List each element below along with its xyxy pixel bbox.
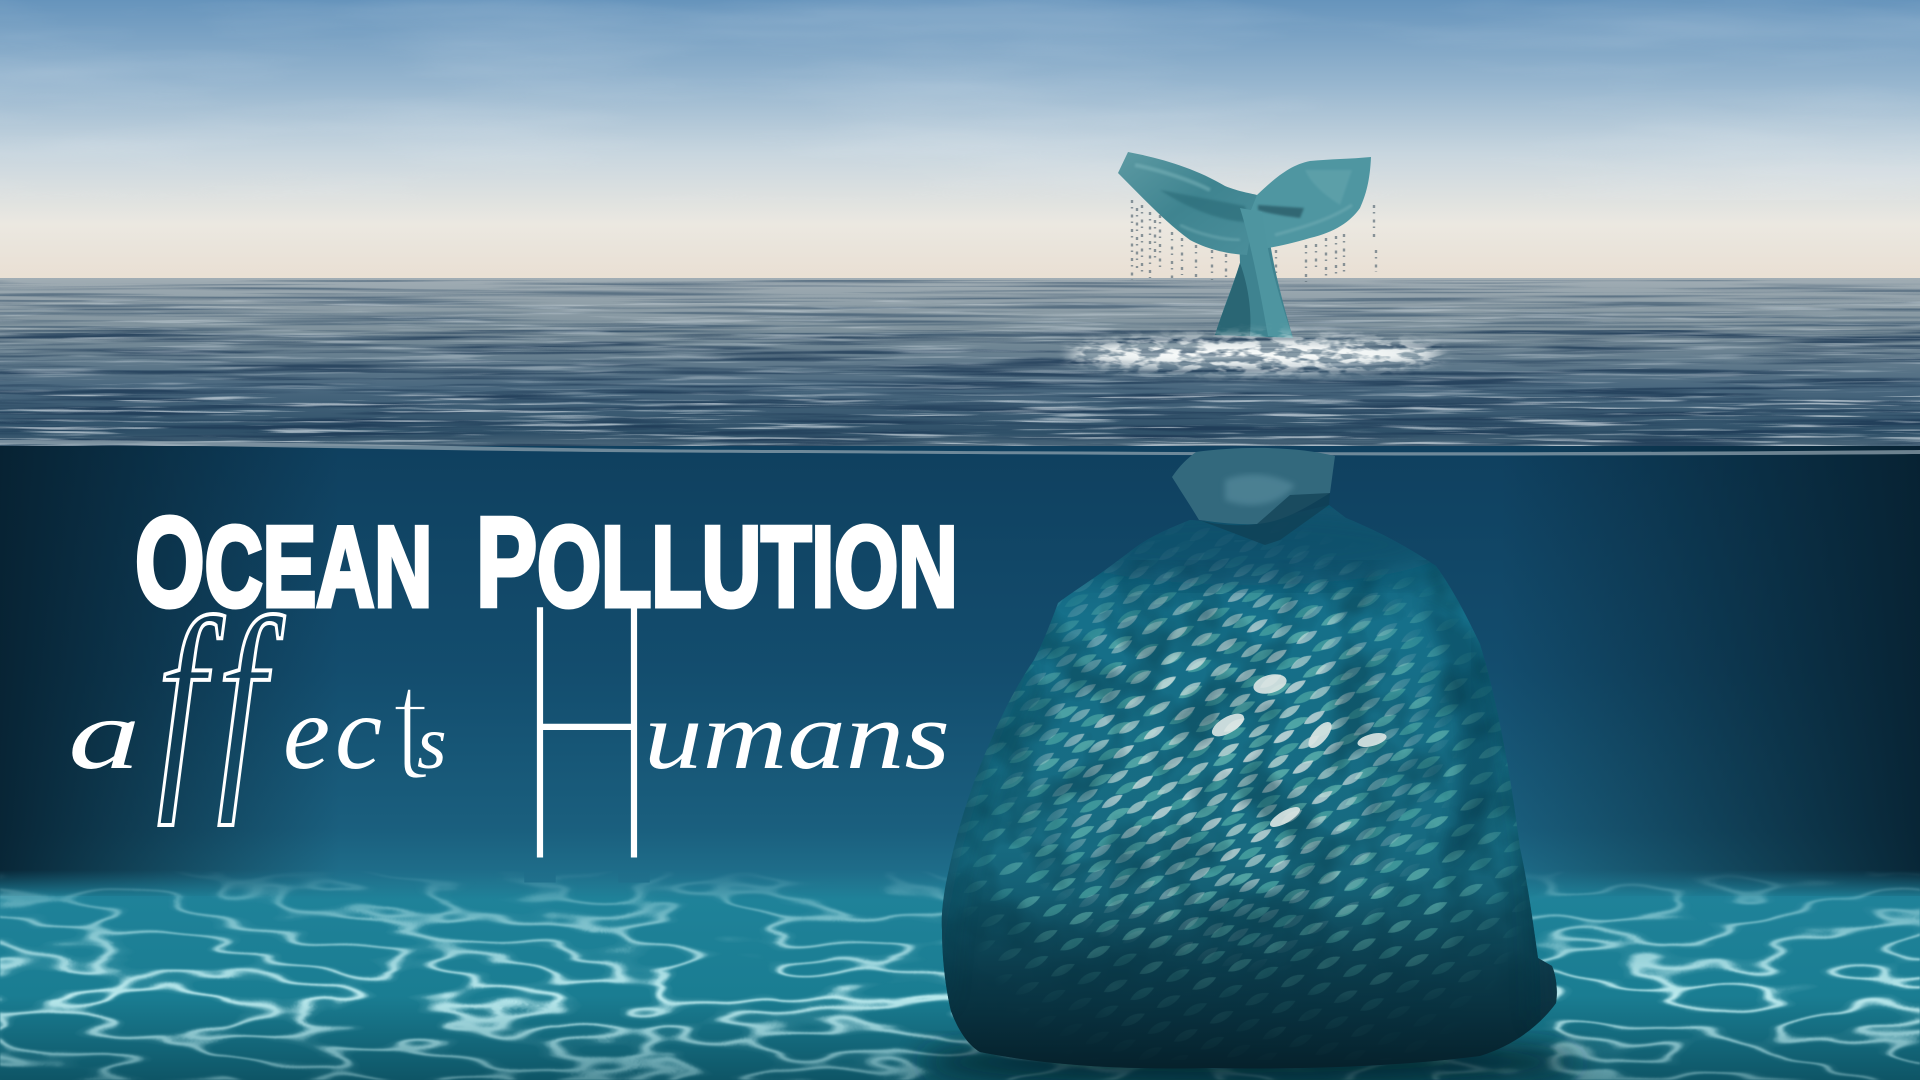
subtitle word: affects: f xyxy=(217,571,285,826)
right fluke xyxy=(1247,157,1371,249)
title xyxy=(68,492,958,956)
subtitle word: affects: c xyxy=(335,674,382,791)
left fluke xyxy=(1118,152,1257,255)
sky xyxy=(0,0,1920,280)
bag knot xyxy=(1172,448,1335,545)
subtitle word: affects: s xyxy=(417,701,447,785)
subtitle word: affects: t xyxy=(390,649,430,811)
tail folds xyxy=(1135,165,1352,240)
water line xyxy=(0,440,1920,456)
subtitle word: umans: umans xyxy=(644,682,950,789)
bright fish xyxy=(1208,671,1388,831)
sandy sea floor with caustics xyxy=(0,870,1920,1080)
bag body xyxy=(920,500,1570,1080)
subtitle word: affects: f xyxy=(157,571,225,826)
subtitle word: affects: e xyxy=(283,674,330,791)
subtitle word: Humans capital H: H xyxy=(514,509,660,956)
contact shadow xyxy=(920,1036,1580,1080)
heading: Pollution: POLLUTION xyxy=(476,492,958,634)
subtitle word: affects: a xyxy=(68,679,140,790)
whale tail made of plastic bag xyxy=(1067,152,1443,370)
sea surface xyxy=(0,278,1920,454)
subtitle word: affects xyxy=(68,571,447,826)
water drops xyxy=(1132,200,1376,282)
heading: Ocean: OCEAN xyxy=(135,493,432,634)
fish school xyxy=(952,540,1533,1036)
tail stalk xyxy=(1215,205,1293,338)
underwater column xyxy=(0,446,1920,1080)
plastic bag full of fish xyxy=(920,448,1580,1080)
bag shading xyxy=(942,904,1557,1068)
splash foam xyxy=(1067,338,1443,370)
